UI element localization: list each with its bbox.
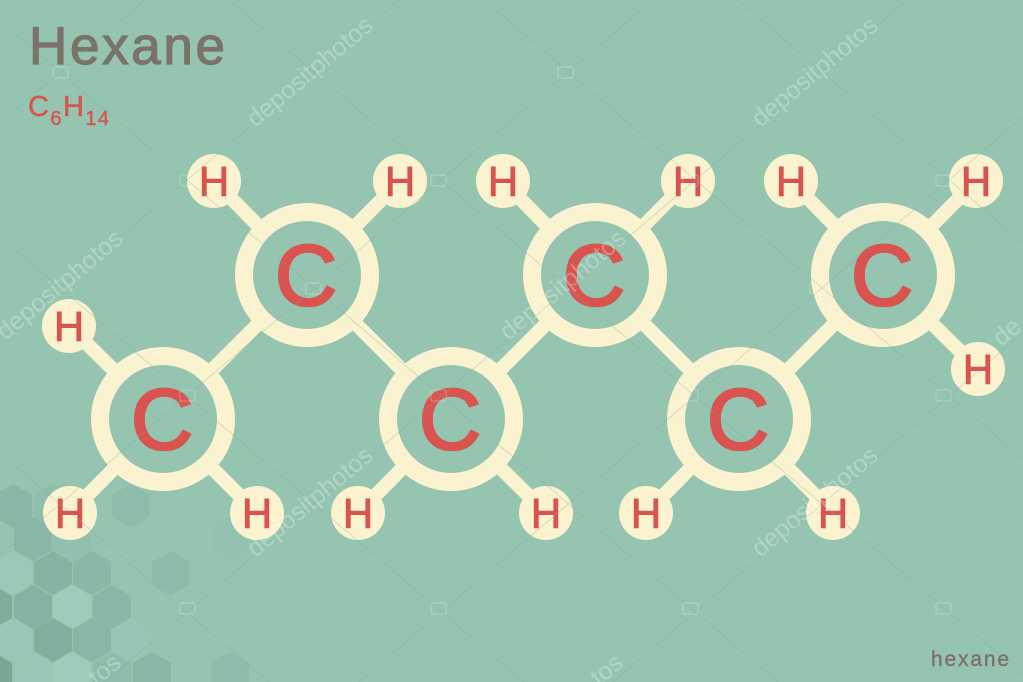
chemical formula: C bbox=[28, 91, 49, 123]
hydrogen atom: H bbox=[776, 158, 806, 205]
carbon atom 2 bbox=[244, 212, 370, 338]
hydrogen atom: H bbox=[385, 158, 415, 205]
title: Hexane bbox=[29, 17, 225, 76]
carbon atom 4 bbox=[532, 212, 658, 338]
hydrogen atom bbox=[187, 154, 241, 208]
carbon atom 5: C bbox=[707, 372, 769, 468]
chemical formula: H bbox=[63, 91, 84, 123]
hydrogen atom bbox=[230, 486, 284, 540]
chemical formula: 14 bbox=[85, 108, 109, 130]
carbon atom 5 bbox=[676, 356, 802, 482]
hydrogen atom bbox=[373, 154, 427, 208]
hydrogen atom: H bbox=[531, 490, 561, 537]
hexagon pattern bbox=[0, 484, 250, 682]
hydrogen atom bbox=[476, 154, 530, 208]
hydrogen atom bbox=[331, 486, 385, 540]
watermark: depositphotos bbox=[746, 441, 883, 563]
hydrogen atom bbox=[806, 486, 860, 540]
hydrogen atom: H bbox=[818, 490, 848, 537]
hydrogen atom bbox=[43, 486, 97, 540]
chemical formula: 6 bbox=[50, 108, 62, 130]
hydrogen atom bbox=[661, 154, 715, 208]
hydrogen atom bbox=[764, 154, 818, 208]
hydrogen atom: H bbox=[673, 158, 703, 205]
hexane molecule bbox=[42, 154, 1005, 540]
hydrogen atom: H bbox=[961, 158, 991, 205]
hydrogen atom bbox=[42, 299, 96, 353]
footer label: hexane bbox=[931, 648, 1009, 671]
watermark: depositphotos bbox=[241, 441, 378, 563]
hydrogen atom bbox=[519, 486, 573, 540]
hydrogen atom: H bbox=[199, 158, 229, 205]
hydrogen atom: H bbox=[54, 303, 84, 350]
carbon atom 1: C bbox=[131, 372, 193, 468]
hydrogen atom bbox=[949, 154, 1003, 208]
bonds bbox=[69, 181, 978, 513]
watermark: depositphotos bbox=[746, 11, 883, 133]
hydrogen atom bbox=[951, 342, 1005, 396]
hydrogen atom: H bbox=[343, 490, 373, 537]
watermark: depositphotos bbox=[241, 11, 378, 133]
carbon atom 4: C bbox=[563, 228, 625, 324]
carbon atom 3: C bbox=[419, 372, 481, 468]
carbon atom 1 bbox=[100, 356, 226, 482]
hydrogen atom bbox=[619, 486, 673, 540]
hydrogen atom: H bbox=[963, 346, 993, 393]
hydrogen atom: H bbox=[488, 158, 518, 205]
carbon atom 6 bbox=[820, 212, 946, 338]
carbon atom 2: C bbox=[275, 228, 337, 324]
carbon atom 6: C bbox=[851, 228, 913, 324]
carbon atom 3 bbox=[388, 356, 514, 482]
hydrogen atom: H bbox=[631, 490, 661, 537]
hydrogen atom: H bbox=[55, 490, 85, 537]
watermark: depositphotos bbox=[494, 224, 631, 346]
hydrogen atom: H bbox=[242, 490, 272, 537]
